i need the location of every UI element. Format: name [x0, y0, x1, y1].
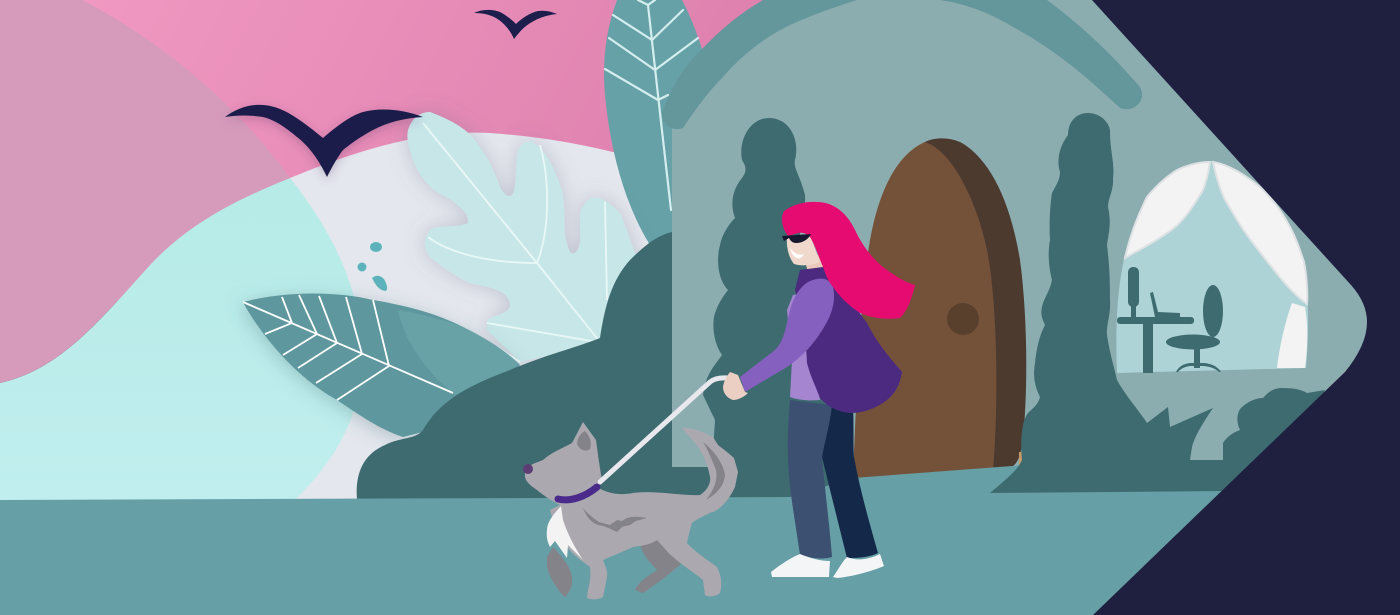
pale grey hill	[290, 133, 670, 500]
window with curtains and desk	[1116, 161, 1308, 373]
dog front rear leg	[547, 547, 572, 597]
arm	[740, 279, 834, 392]
woman	[723, 202, 915, 578]
face	[787, 235, 820, 265]
pink sky	[0, 0, 800, 300]
lighter leaf half	[398, 310, 520, 395]
house wall	[672, 0, 1400, 520]
guide dog	[523, 422, 738, 599]
cyan hill	[0, 178, 362, 500]
front leg	[788, 400, 832, 558]
window opening	[1116, 161, 1308, 373]
right tree and shrubs	[990, 113, 1325, 493]
office chair	[1166, 285, 1223, 372]
smile	[790, 248, 804, 258]
striped teal leaf	[243, 294, 520, 437]
vest	[795, 267, 902, 413]
desk and computer	[1117, 267, 1194, 373]
door side	[925, 138, 1026, 471]
dog hind leg	[635, 539, 680, 593]
dark navy arrow background	[1092, 0, 1400, 615]
ground	[0, 465, 1400, 615]
large bird	[225, 105, 423, 177]
lower right curtain	[1277, 303, 1307, 368]
door knob	[947, 303, 979, 335]
right curtain	[1213, 162, 1307, 304]
door front	[853, 142, 996, 478]
left tree and bush	[357, 118, 850, 500]
dog nose	[523, 464, 533, 474]
roof band	[662, 0, 1142, 129]
dog body	[525, 422, 721, 599]
shirt	[787, 290, 822, 400]
left curtain	[1125, 162, 1210, 258]
dog fur marks	[583, 508, 647, 532]
dog tail	[682, 428, 738, 515]
pale oak leaf	[407, 112, 640, 362]
mauve hill	[0, 0, 290, 383]
hand	[723, 372, 748, 400]
small bird	[474, 10, 557, 39]
right shoe	[833, 554, 884, 578]
harness handle	[600, 378, 729, 482]
dog collar	[558, 487, 597, 500]
left shoe	[771, 554, 830, 577]
door	[853, 138, 1026, 478]
small teal drops	[358, 242, 387, 291]
large teal leaf behind house	[604, 0, 705, 245]
dog white chest fur	[547, 506, 583, 560]
dog tail marks	[703, 442, 725, 500]
neck	[803, 255, 825, 272]
back leg	[822, 405, 878, 558]
hair	[782, 202, 915, 319]
sunglasses	[782, 234, 811, 243]
dog ear inner	[577, 431, 591, 451]
